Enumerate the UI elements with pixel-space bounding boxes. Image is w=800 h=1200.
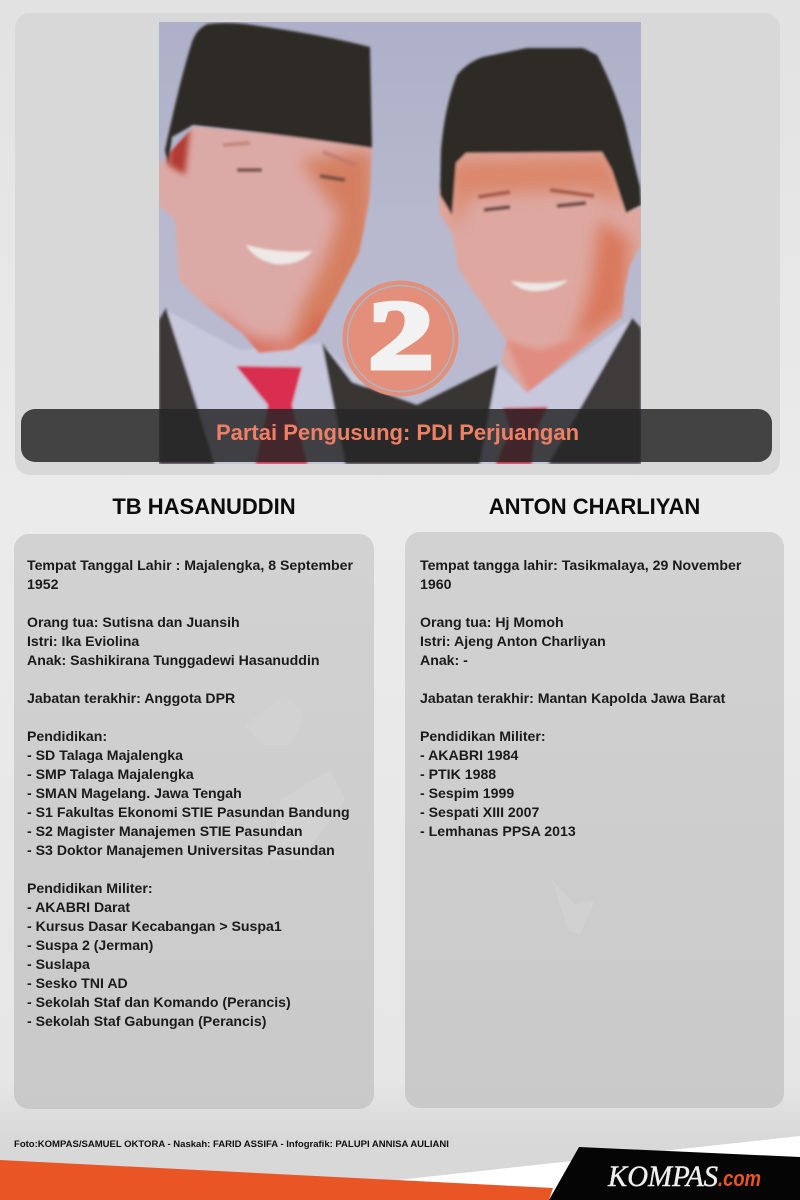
white wedge: [398, 1136, 800, 1200]
right man tie: [495, 407, 548, 464]
text block: right biography: Tempat tangga lahir: Tasikmalaya, 29 November 1960 Orang tua: Hj Momoh Istri: Ajeng Anton Charliyan Anak: - Jabatan terakhir: Mantan Kapolda Jawa Barat Pendidikan Militer: - AKABRI 1984 - PTIK 1988 - Sespim 1999 - Sespati XIII 2007 - Lemhanas PPSA 2013: [420, 557, 741, 839]
banner text: Partai Pengusung: PDI Perjuangan: [216, 420, 579, 445]
text block: left biography: Tempat Tanggal Lahir : Majalengka, 8 September 1952 Orang tua: Sutisna dan Juansih Istri: Ika Eviolina Anak: Sashikirana Tunggadewi Hasanuddin Jabatan terakhir: Anggota DPR Pendidikan: - SD Talaga Majalengka - SMP Talaga Majalengka - SMAN Magelang. Jawa Tengah - S1 Fakultas Ekonomi STIE Pasundan Bandung - S2 Magister Manajemen STIE Pasundan - S3 Doktor Manajemen Universitas Pasundan Pendidikan Militer: - AKABRI Darat - Kursus Dasar Kecabangan > Suspa1 - Suspa 2 (Jerman) - Suslapa - Sesko TNI AD - Sekolah Staf dan Komando (Perancis) - Sekolah Staf Gabungan (Perancis): [27, 557, 353, 1029]
panel: right biography: [405, 532, 784, 1108]
panel: left biography: [14, 534, 374, 1109]
left man face: [155, 120, 375, 360]
orange band: [0, 1160, 553, 1200]
icon: candidate number 2 badge: [342, 280, 458, 396]
right man face: [435, 150, 645, 400]
icon: candidate number 2 badge: 2: [369, 281, 433, 389]
left man tie: [236, 366, 308, 464]
photo: two candidates: [159, 22, 641, 464]
banner: supporting party: [21, 409, 772, 462]
right man jacket: [548, 318, 641, 464]
logo: Kompas.com: .com: [718, 1166, 761, 1191]
panel: top photo panel: [15, 13, 780, 475]
left man shirt: [165, 310, 368, 464]
black logo block: [549, 1147, 800, 1200]
left man jacket: [159, 308, 215, 464]
left man features: [223, 143, 356, 165]
credits line: Foto:KOMPAS/SAMUEL OKTORA - Naskah: FARID ASSIFA - Infografik: PALUPI ANNISA AULIANI: [14, 1139, 449, 1150]
right man hat: [440, 48, 641, 215]
heading: TB Hasanuddin: TB HASANUDDIN: [112, 494, 296, 519]
right man features: [478, 190, 594, 197]
right man shirt: [480, 318, 641, 464]
heading: Anton Charliyan: ANTON CHARLIYAN: [489, 494, 700, 519]
logo: Kompas.com: KOMPAS: [607, 1160, 718, 1193]
footer graphic: [0, 1136, 800, 1200]
left man hat: [165, 23, 372, 165]
